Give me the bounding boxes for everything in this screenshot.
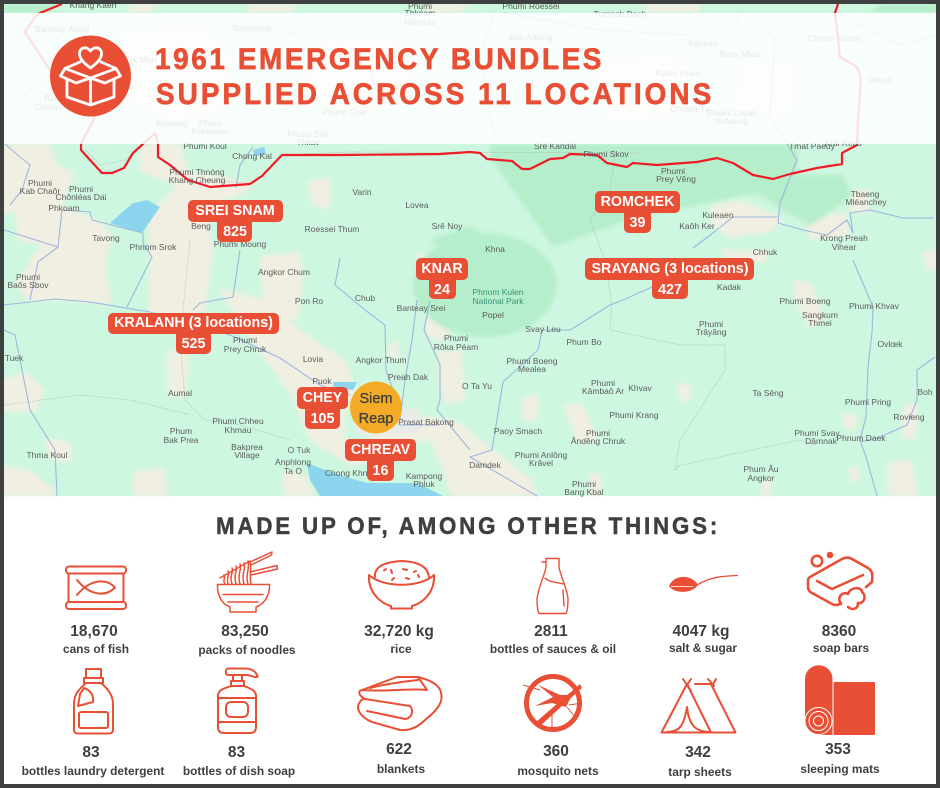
item: bottles of dish soap: 83: [228, 744, 245, 761]
map place names: Banteay Ampil: [35, 24, 89, 34]
map place names: Phumi Krang: [609, 410, 659, 420]
map place names: Phumi: [661, 166, 685, 176]
map place names: Phumi Pring: [845, 397, 891, 407]
map place names: Phumi Chheu: [212, 416, 264, 426]
map place names: Phnum Daek: [836, 433, 886, 443]
map place names: Phumi: [591, 378, 615, 388]
map place names: Kampong: [406, 471, 442, 481]
map place names: Phumi Bak: [287, 129, 329, 139]
icon: soap with bubbles: [808, 553, 872, 609]
map place names: Phumi Khvav: [849, 301, 900, 311]
label: Srayang: [585, 258, 754, 299]
map place names: Cheam Tè: [670, 104, 710, 114]
map place names: Krâsang: [716, 116, 748, 126]
map place names: Choam Ksant: [808, 33, 860, 43]
map place names: Village: [234, 450, 260, 460]
item: tarp sheets: tarp sheets: [668, 765, 732, 779]
item: bottles laundry detergent: 83: [82, 744, 100, 761]
map place names: Rovieng: [893, 412, 925, 422]
map place names: Phumi: [586, 428, 610, 438]
item: cans of fish: cans of fish: [63, 642, 129, 656]
map place names: Boss Mlou: [720, 49, 760, 59]
subheading: MADE UP OF, AMONG OTHER THINGS:: [216, 512, 717, 539]
item: sleeping mats: sleeping mats: [800, 762, 880, 776]
label: Chey: [297, 387, 348, 429]
label: Srayang: SRAYANG (3 locations): [591, 261, 749, 277]
item: bottles laundry detergent: [22, 669, 164, 778]
map place names: Chunh: [867, 75, 893, 85]
map place names: Bak Prea: [164, 435, 199, 445]
Siem Reap marker: [350, 382, 402, 434]
map place names: Krasang: [156, 118, 188, 128]
label: Romchek: 39: [630, 215, 645, 231]
map place names: Lovea: [405, 200, 429, 210]
item: blankets: [358, 677, 442, 776]
map place names: Thmei: [808, 318, 832, 328]
label: Kralanh: [108, 313, 279, 354]
map place names: Banteay Srei: [397, 303, 445, 313]
map place names: Beng: [191, 221, 211, 231]
label: Srayang: 427: [658, 282, 682, 298]
map place names: Krâvel: [529, 458, 553, 468]
map place names: Damdek: [469, 460, 502, 470]
country border line: [25, 4, 861, 187]
map place names: Phumi: [408, 1, 432, 11]
map place names: Trâyăng: [696, 327, 727, 337]
item: mosquito nets: [517, 676, 599, 778]
map place names: Thkav: [296, 137, 320, 147]
map place names: Phumi Boeng: [506, 356, 558, 366]
item: tarp sheets: 342: [685, 744, 711, 761]
map place names: Kulen Prum: [656, 68, 700, 78]
map place names: Chub: [355, 293, 375, 303]
map place names: Puok: [312, 376, 332, 386]
map place names: Phumi: [572, 479, 596, 489]
map place names: Angkor Chum: [258, 267, 310, 277]
map place names: Krong Preah: [820, 233, 868, 243]
item: cans of fish: 18,670: [70, 623, 118, 640]
map place names: Banteay: [44, 93, 76, 103]
map place names: Phumi: [699, 319, 723, 329]
icon: rice bowl: [369, 561, 434, 608]
map place names: Srê Noy: [432, 221, 463, 231]
icon: noodle bowl: [217, 552, 278, 612]
location pins on the map: [108, 191, 754, 481]
map place names: Bakprea: [231, 442, 263, 452]
map place names: Phnom Kulen: [472, 287, 524, 297]
map place names: Tmat Paeuy: [789, 141, 836, 151]
map place names: Kantuot: [688, 38, 718, 48]
map place names: Phumi: [233, 335, 257, 345]
map place names: Ândêng Chruk: [571, 436, 626, 446]
item: sleeping mats: 353: [825, 741, 851, 758]
map place names: Srê Kandal: [534, 141, 576, 151]
map place names: Paoy Smach: [494, 426, 542, 436]
label: Chreav: [345, 439, 416, 481]
map place names: Phumi Char: [323, 107, 368, 117]
map place names: Kadak: [717, 282, 742, 292]
map place names: Phumi Svay: [794, 428, 840, 438]
map place names: Prey Chruk: [224, 344, 267, 354]
label: Chreav: CHREAV: [351, 442, 411, 458]
map place names: Bak Anlung: [509, 32, 553, 42]
map place names: Sangkum: [802, 310, 838, 320]
map place names: Kaôh Ker: [679, 221, 715, 231]
map place names: Phumi Thnóng: [169, 167, 225, 177]
map place names: Chônléas Dai: [55, 192, 107, 202]
icon: soap pump bottle: [218, 668, 258, 733]
item: packs of noodles: 83,250: [221, 623, 269, 640]
item: soap bars: [808, 553, 872, 655]
map place names: Anphlong: [275, 457, 311, 467]
map place names: Phumi Chrâk: [707, 108, 757, 118]
map place names: Chong Khneas: [325, 468, 381, 478]
map place names: Chong Kal: [232, 151, 272, 161]
label: Chreav: 16: [373, 463, 388, 479]
map place names: Phumi: [444, 333, 468, 343]
map place names: Khang Kaen: [70, 0, 117, 10]
label: Srei Snam: [188, 200, 283, 242]
map place names: Tumnob Dach: [593, 9, 647, 19]
item: bottles of sauces and oil: [490, 558, 616, 656]
map place names: Tuek: [5, 353, 24, 363]
map place names: National Park: [472, 296, 524, 306]
map place names: Preah Dak: [388, 372, 429, 382]
item: soap bars: 8360: [822, 623, 856, 640]
map place names: Varin: [352, 187, 372, 197]
map place names: Prasat Bakong: [398, 417, 454, 427]
item: mosquito nets: mosquito nets: [517, 764, 599, 778]
item: salt and sugar: 4047 kg: [673, 623, 729, 640]
label: Kralanh: KRALANH (3 locations): [114, 315, 273, 331]
icon: sauce bottle: [537, 558, 568, 614]
map place names: Vihear: [832, 242, 856, 252]
map place names: Phum Âu: [744, 464, 779, 474]
map place names: O Tuk: [288, 445, 311, 455]
item: bottles of sauces and oil: bottles of sauces & oil: [490, 642, 616, 656]
map place names: Phumi Moung: [214, 239, 266, 249]
icon: tents: [662, 679, 736, 732]
map place names: Popel: [482, 310, 504, 320]
item: mosquito nets: 360: [543, 743, 569, 760]
item: salt and sugar: [669, 576, 738, 655]
label: Kralanh: 525: [182, 336, 205, 352]
map place names: Prey Vêng: [656, 174, 696, 184]
map place names: Ovlœk: [877, 339, 903, 349]
map place names: Rôka Péam: [434, 342, 478, 352]
item: packs of noodles: [198, 552, 296, 657]
item: rice: 32,720 kg: [364, 623, 434, 640]
item: cans of fish: [63, 566, 129, 656]
map place names: Bang Kbal: [564, 487, 604, 497]
map place names: Phumi Boeng: [779, 296, 831, 306]
item: salt and sugar: salt & sugar: [669, 641, 737, 655]
item: tarp sheets: [662, 679, 736, 779]
icon: crossed-out mosquito: [523, 676, 582, 730]
label: Srei Snam: 825: [223, 224, 247, 240]
map place names: Khmau: [225, 425, 252, 435]
map place names: Phumi Anlông: [515, 450, 567, 460]
map place names: Chhmar: [35, 102, 65, 112]
map place names: Phum: [170, 426, 192, 436]
map place names: Phumi Roessei: [502, 1, 560, 11]
map place names: Phumi Skov: [583, 149, 629, 159]
label: Romchek: [595, 191, 680, 233]
header band: [4, 13, 936, 144]
item: rice: [364, 561, 434, 656]
map place names: Thma Koul: [26, 450, 68, 460]
map place names: O Ta Yu: [462, 381, 492, 391]
item: sleeping mats: [800, 665, 880, 776]
map place names: Khvav: [628, 383, 653, 393]
map place names: Roessei Thum: [305, 224, 359, 234]
map place names: Chhuk: [753, 247, 778, 257]
map place names: [5, 0, 933, 497]
label: Chey: 105: [311, 411, 334, 427]
item: bottles of dish soap: bottles of dish soap: [183, 764, 295, 778]
map place names: Rômeâs: [404, 17, 436, 27]
map place names: Angkor Thum: [356, 355, 406, 365]
title: 1961 EMERGENCY BUNDLES: [155, 43, 601, 76]
label: Knar: 24: [434, 282, 450, 298]
label: Srei Snam: SREI SNAM: [195, 203, 275, 219]
map of Siem Reap region: [0, 0, 940, 497]
map place names: Phumi: [16, 272, 40, 282]
item: blankets: blankets: [377, 762, 426, 776]
icon: gift box with heart: [50, 36, 131, 116]
item: bottles laundry detergent: bottles laundry detergent: [22, 764, 164, 778]
map place names: Samraong: [232, 23, 272, 33]
map place names: Krâl Reas: [824, 138, 862, 148]
title: [155, 43, 711, 111]
Siem Reap marker: Siem: [359, 391, 393, 407]
icon: fish can: [66, 566, 126, 609]
label: Knar: [416, 258, 468, 299]
icon: folded blanket: [358, 677, 442, 730]
map place names: Thkéam: [405, 8, 435, 18]
map place names: Mléanchey: [845, 197, 887, 207]
map place names: Tbaeng: [851, 189, 880, 199]
map place names: Lovia: [303, 354, 323, 364]
label: Knar: KNAR: [421, 261, 463, 277]
item: packs of noodles: packs of noodles: [198, 643, 296, 657]
map place names: Phumi: [69, 184, 93, 194]
item: soap bars: soap bars: [813, 641, 869, 655]
item: bottles of sauces and oil: 2811: [534, 623, 568, 640]
map place names: Kokspean: [191, 126, 229, 136]
map place names: Pon Ro: [295, 296, 323, 306]
map place names: Ta Sêng: [752, 388, 784, 398]
map place names: Kab Chaôr: [20, 186, 60, 196]
label: Chey: CHEY: [303, 390, 343, 406]
map place names: Dâmnak: [805, 436, 838, 446]
icon: rolled mat: [805, 665, 875, 735]
map place names: Kuleaen: [702, 210, 734, 220]
map place names: Boh: [917, 387, 933, 397]
map place names: Phnom Srok: [130, 242, 177, 252]
map place names: Baôs Sbov: [7, 280, 49, 290]
label: Romchek: ROMCHEK: [601, 194, 675, 210]
map place names: Phumi: [28, 178, 52, 188]
map place names: Phkoam: [48, 203, 80, 213]
map place names: Ork Mon: [124, 55, 157, 65]
icon: spoon of salt: [669, 576, 738, 592]
item: bottles of dish soap: [183, 668, 295, 778]
map place names: Phum Bo: [567, 337, 602, 347]
icon: detergent bottle: [74, 669, 113, 734]
map place names: Angkor: [748, 473, 775, 483]
map place names: Kâmbaô Ar: [582, 386, 624, 396]
item: rice: rice: [390, 642, 412, 656]
map place names: Khna: [485, 244, 505, 254]
map place names: Phum: [199, 118, 221, 128]
title: SUPPLIED ACROSS 11 LOCATIONS: [156, 78, 711, 111]
map place names: Khang Cheung: [169, 175, 226, 185]
map place names: Phumi Koul: [183, 141, 227, 151]
map place names: Svay Leu: [525, 324, 561, 334]
map place names: Aumal: [168, 388, 192, 398]
item: blankets: 622: [386, 741, 412, 758]
map place names: Tavong: [92, 233, 120, 243]
Siem Reap marker: Reap: [359, 411, 393, 427]
map place names: Ta O: [284, 466, 302, 476]
map place names: Phluk: [413, 479, 435, 489]
map place names: Mealea: [518, 364, 546, 374]
